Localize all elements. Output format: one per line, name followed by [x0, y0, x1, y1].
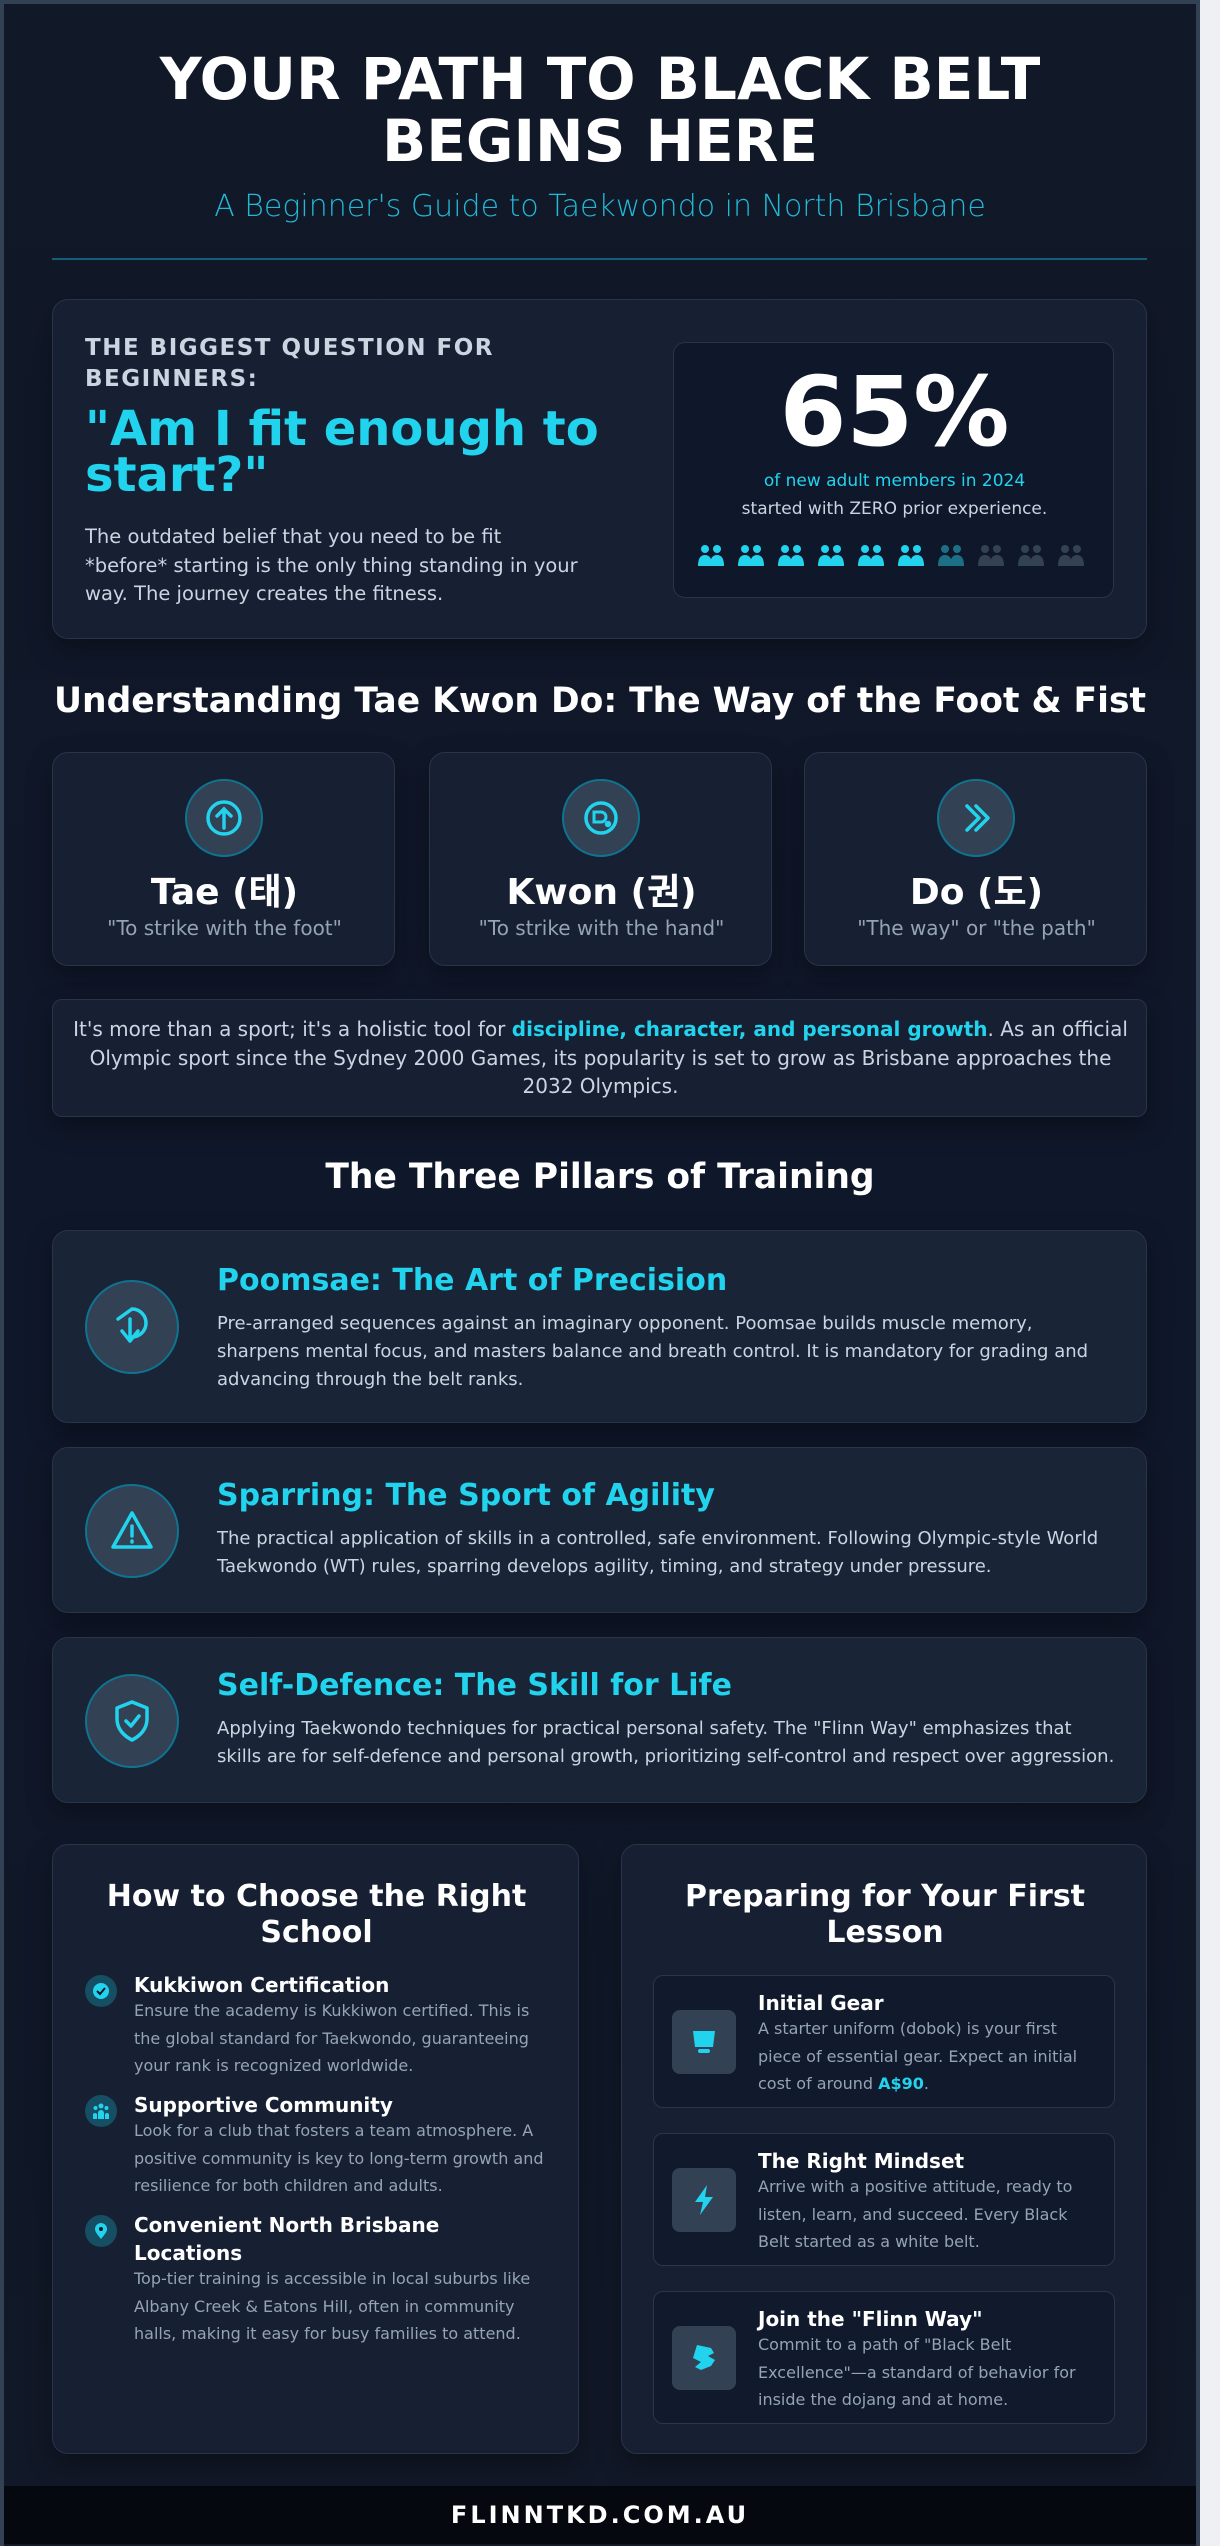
body text: *before* starting is the only thing standing in your way. The journey creates the fitness.	[85, 554, 578, 605]
meaning: "To strike with the foot"	[107, 916, 342, 940]
item: kukkiwon	[85, 1973, 529, 2075]
icon: warning	[85, 1484, 179, 1578]
icon: pin	[85, 2215, 117, 2247]
title: Do (도)	[910, 872, 1043, 913]
text block: holistic: It's more than a sport; it's a holistic tool for discipline, character, and personal growth. As an official Olympic sport since the Sydney 2000 Games, its popularity is set to grow as Brisbane approaches the 2032 Olympics.	[73, 1017, 1128, 1098]
item: kukkiwon: Ensure the academy is Kukkiwon certified. This is the global standard for Taekwondo, guaranteeing your rank is recognized worldwide.	[134, 2001, 529, 2075]
icon: badge	[85, 1975, 117, 2007]
icon: shield	[85, 1674, 179, 1768]
icon: poomsae	[85, 1280, 179, 1374]
quote: "Am I fit enough to start?"	[85, 401, 599, 503]
subcard: mindset: Arrive with a positive attitude, ready to listen, learn, and succeed. Every Black Belt started as a white belt.	[758, 2177, 1072, 2251]
item: kukkiwon: Kukkiwon Certification	[134, 1973, 389, 1997]
title: Self-Defence: The Skill for Life	[217, 1668, 732, 1703]
stat caption: started with ZERO prior experience.	[742, 499, 1047, 519]
subcard: gear: Initial Gear	[758, 1991, 884, 2015]
meaning: "The way" or "the path"	[857, 916, 1096, 940]
title: Sparring: The Sport of Agility	[217, 1478, 715, 1513]
text block: holistic	[52, 999, 1147, 1117]
subcard: gear	[653, 1975, 1115, 2108]
heading: How to Choose the Right School	[107, 1879, 526, 1950]
footer	[4, 2486, 1196, 2544]
item: locations: Convenient North Brisbane Locations	[134, 2213, 439, 2265]
title: Kwon (권)	[506, 872, 697, 913]
subcard: flinn way: Commit to a path of "Black Belt Excellence"—a standard of behavior for inside the dojang and at home.	[758, 2335, 1076, 2409]
icon: fist	[562, 779, 640, 857]
icon: arrow up circle	[185, 779, 263, 857]
heading: understanding: Understanding Tae Kwon Do: The Way of the Foot & Fist	[54, 681, 1146, 721]
label: THE BIGGEST QUESTION FOR BEGINNERS:	[85, 335, 494, 392]
description: Applying Taekwondo techniques for practical personal safety. The "Flinn Way" emphasizes that	[217, 1718, 1072, 1739]
subcard: flinn way	[653, 2291, 1115, 2424]
item: community: Supportive Community	[134, 2093, 393, 2117]
card: Do	[804, 752, 1147, 966]
subcard: mindset: The Right Mindset	[758, 2149, 964, 2173]
title: YOUR PATH TO BLACK BELT	[160, 45, 1040, 113]
item: community	[85, 2093, 544, 2195]
icon: uniform	[672, 2010, 736, 2074]
panel: self-defence	[52, 1637, 1147, 1803]
body text	[84, 525, 578, 605]
description: The practical application of skills in a controlled, safe environment. Following Olympic-style World Taekwondo (WT) rules, sparring develops agility, timing, and strategy under pressure.	[217, 1528, 1098, 1577]
icon: dragon	[672, 2326, 736, 2390]
item: community: Look for a club that fosters a team atmosphere. A positive community is key to long-term growth and resilience for both children and adults.	[134, 2121, 544, 2195]
subcard: mindset	[653, 2133, 1115, 2266]
icon: chevrons	[937, 779, 1015, 857]
panel: choose school	[52, 1844, 579, 2454]
icon: group	[85, 2095, 117, 2127]
subtitle: A Beginner's Guide to Taekwondo in North Brisbane	[214, 189, 986, 224]
stat box	[673, 342, 1114, 598]
item: locations	[85, 2213, 530, 2343]
title: BEGINS HERE	[382, 107, 818, 175]
people icon row	[698, 545, 1084, 566]
subcard: gear: A starter uniform (dobok) is your first piece of essential gear. Expect an initial cost of around A$90.	[758, 2019, 1077, 2093]
footer: FLINNTKD.COM.AU	[451, 2501, 749, 2529]
subcard: flinn way: Join the "Flinn Way"	[758, 2307, 982, 2331]
panel: poomsae	[52, 1230, 1147, 1423]
icon: bolt	[672, 2168, 736, 2232]
item: locations: Top-tier training is accessible in local suburbs like Albany Creek & Eatons Hill, often in community halls, making it easy for busy families to attend.	[134, 2269, 530, 2343]
description: Pre-arranged sequences against an imaginary opponent. Poomsae builds muscle memory, sharpens mental focus, and masters balance and breath control. It is mandatory for grading and advancing through the belt ranks.	[217, 1313, 1088, 1390]
big number: 65%	[780, 356, 1009, 468]
heading: Preparing for Your First Lesson	[685, 1879, 1085, 1950]
description: skills are for self-defence and personal growth, prioritizing self-control and respect over aggression.	[217, 1746, 1114, 1767]
panel: hero question	[52, 299, 1147, 639]
stat caption: of new adult members in 2024	[764, 471, 1025, 491]
card: Kwon	[429, 752, 772, 966]
stat caption	[742, 471, 1047, 519]
panel: sparring	[52, 1447, 1147, 1613]
title: Tae (태)	[151, 872, 298, 913]
heading: pillars: The Three Pillars of Training	[325, 1157, 875, 1197]
meaning: "To strike with the hand"	[479, 916, 724, 940]
description	[217, 1718, 1114, 1767]
title: Poomsae: The Art of Precision	[217, 1263, 727, 1298]
card: Tae	[52, 752, 395, 966]
title	[159, 45, 1040, 175]
panel: first lesson	[621, 1844, 1147, 2454]
body text: The outdated belief that you need to be fit	[85, 525, 501, 548]
